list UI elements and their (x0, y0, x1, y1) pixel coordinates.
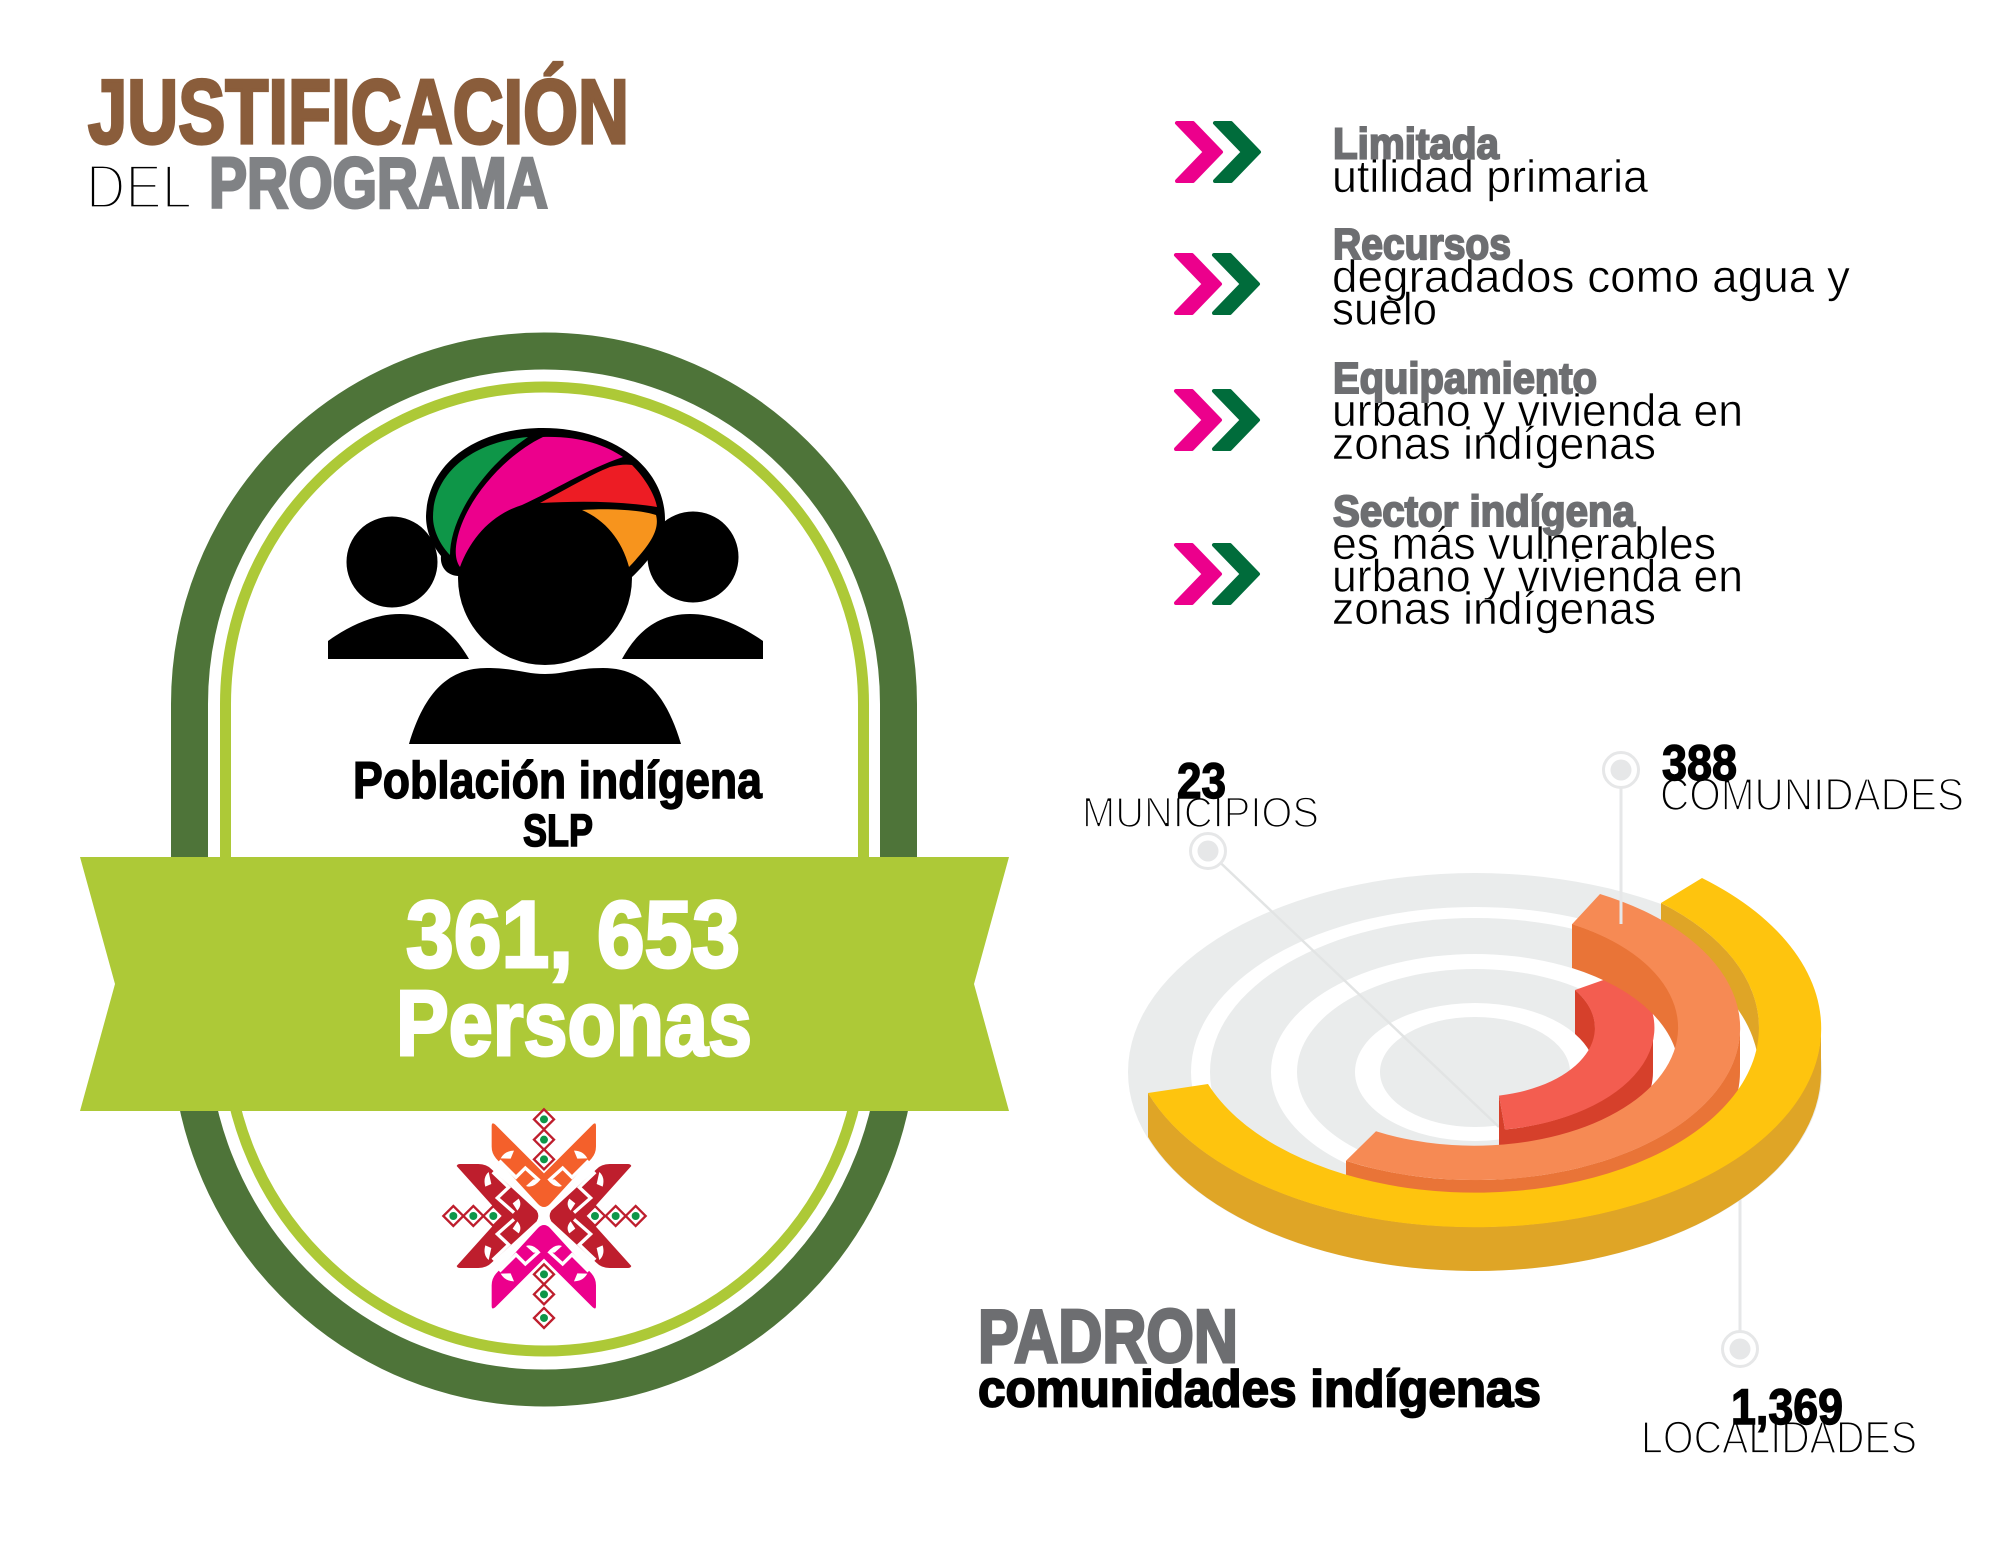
arc: municipios red (1499, 972, 1654, 1174)
marker: localidades (1722, 1332, 1758, 1366)
icon: people with turban (328, 428, 763, 744)
marker: municipios (1190, 834, 1226, 868)
title: DEL (86, 153, 192, 222)
chart floor rings (1128, 873, 1822, 1271)
item: sector indigena: es más vulnerables (1332, 518, 1716, 569)
label: localidades: LOCALIDADES (1641, 1412, 1917, 1463)
badge inner ring (226, 387, 864, 1351)
heading: padron (978, 1294, 1541, 1418)
item: sector indigena: urbano y vivienda en (1332, 550, 1743, 602)
item: recursos: degradados como agua y (1332, 251, 1851, 302)
leader line: municipios (1208, 851, 1499, 1127)
heading: padron: comunidades indígenas (978, 1360, 1541, 1418)
item: equipamiento (1176, 354, 1743, 469)
leader line: localidades (1738, 1190, 1742, 1349)
item: recursos (1176, 220, 1851, 334)
marker: comunidades (1604, 752, 1638, 788)
banner figure: Personas (396, 971, 752, 1075)
banner (80, 857, 1009, 1111)
label: comunidades: 388 (1662, 735, 1737, 791)
badge outer ring (190, 351, 899, 1388)
label: municipios: 23 (1177, 753, 1226, 809)
item: limitada: utilidad primaria (1332, 151, 1649, 202)
leader line: comunidades (1620, 770, 1622, 924)
item: limitada (1177, 120, 1649, 202)
banner figure (396, 882, 752, 1075)
label: municipios: MUNICIPIOS (1082, 789, 1319, 837)
heading: padron: PADRON (978, 1294, 1238, 1378)
arc: comunidades orange (1346, 894, 1759, 1224)
label: localidades: 1,369 (1731, 1379, 1843, 1435)
icon: embroidered emblem (443, 1109, 646, 1328)
item: sector indigena (1176, 487, 1743, 634)
label: localidades (1641, 1379, 1917, 1463)
arc: localidades yellow (1148, 878, 1821, 1271)
title (86, 62, 629, 224)
badge: population (80, 351, 1009, 1388)
label: comunidades: COMUNIDADES (1660, 769, 1964, 820)
item: recursos: suelo (1332, 284, 1437, 334)
item: equipamiento: urbano y vivienda en (1332, 385, 1743, 436)
item: sector indigena: Sector indígena (1333, 487, 1635, 536)
item: limitada: Limitada (1333, 120, 1499, 168)
population label: Población indígena (353, 752, 763, 810)
label: municipios (1082, 753, 1319, 837)
title: PROGRAMA (209, 144, 548, 224)
item: sector indigena: zonas indígenas (1332, 583, 1656, 634)
title: JUSTIFICACIÓN (88, 62, 629, 163)
label: comunidades (1660, 735, 1964, 820)
item: recursos: Recursos (1333, 220, 1511, 269)
population label: SLP (523, 805, 593, 856)
list: justification items (1176, 120, 1851, 634)
population label (353, 752, 763, 856)
item: equipamiento: Equipamiento (1333, 354, 1597, 403)
banner figure: 361, 653 (406, 882, 740, 988)
item: equipamiento: zonas indígenas (1332, 418, 1656, 469)
chart: radial padron (1128, 752, 1822, 1366)
